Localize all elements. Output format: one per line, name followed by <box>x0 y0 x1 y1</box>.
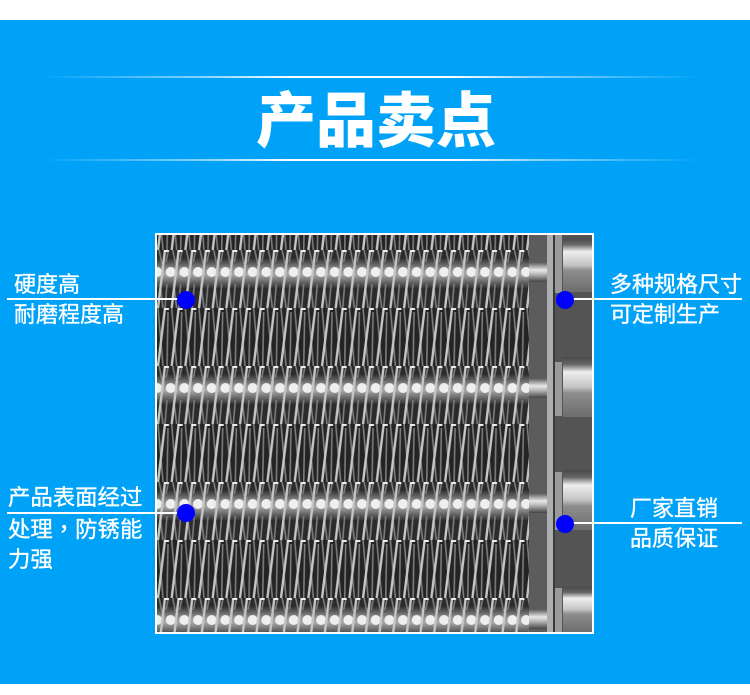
marker dot <box>556 515 574 533</box>
label: 厂家直销 <box>630 496 718 521</box>
product photo: metal mesh belt <box>155 233 594 634</box>
callout: hardness <box>7 272 195 327</box>
label: 多种规格尺寸 <box>610 272 742 297</box>
marker dot <box>177 504 195 522</box>
top decorative rule <box>43 76 700 78</box>
leader line <box>7 512 179 514</box>
vertical plate <box>547 235 553 632</box>
title: 产品卖点 <box>256 88 496 155</box>
callout: sizes <box>556 272 742 327</box>
marker dot <box>556 291 574 309</box>
label: 力强 <box>8 547 53 572</box>
leader line <box>572 298 742 300</box>
label: 耐磨程度高 <box>14 302 124 327</box>
marker dot <box>177 291 195 309</box>
label <box>610 272 742 327</box>
rollers <box>563 238 592 632</box>
label: 品质保证 <box>630 526 718 551</box>
callout: rust resistance <box>7 485 195 572</box>
leader line <box>7 298 179 300</box>
bottom decorative rule <box>43 159 700 161</box>
label <box>630 496 718 551</box>
label <box>14 272 124 327</box>
callout: factory direct <box>556 496 742 551</box>
mesh surface <box>157 235 529 632</box>
gap behind rollers <box>555 235 592 632</box>
side plate <box>157 235 592 632</box>
label: 硬度高 <box>14 272 80 297</box>
label <box>8 485 142 572</box>
leader line <box>572 522 742 524</box>
rod ends <box>529 262 547 629</box>
label: 处理，防锈能 <box>8 512 142 544</box>
label: 可定制生产 <box>610 302 720 327</box>
frame <box>155 233 594 634</box>
label: 产品表面经过 <box>8 485 142 510</box>
roller mounting strips <box>555 235 562 632</box>
